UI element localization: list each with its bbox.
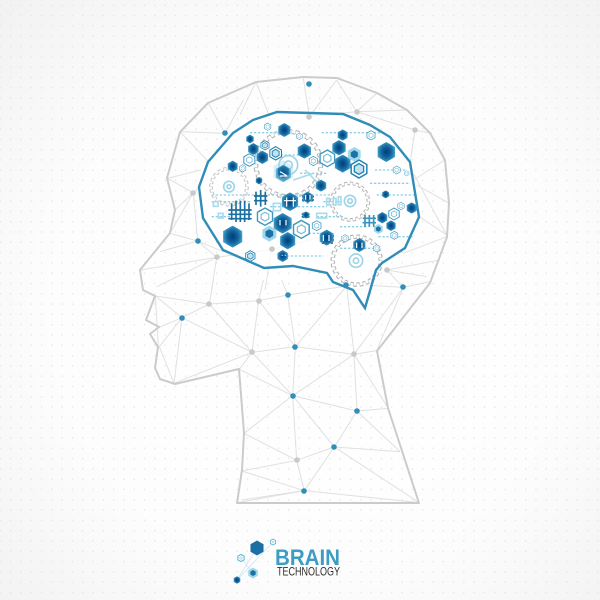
gear: large upper xyxy=(254,130,323,198)
brain outline xyxy=(199,112,419,308)
gear: left xyxy=(210,167,248,206)
mesh: upper head lines xyxy=(141,78,449,290)
brain interior wash xyxy=(199,112,419,308)
head outline xyxy=(140,77,449,503)
gear: bottom xyxy=(331,235,382,286)
gears xyxy=(210,130,382,286)
light hexagons with dark centre xyxy=(262,147,383,242)
gear: right xyxy=(330,182,370,221)
mesh: lower head lines xyxy=(155,280,430,503)
white lattice highlights xyxy=(280,172,362,255)
lattice blocks xyxy=(228,190,334,245)
logo text: BRAIN xyxy=(275,545,340,570)
logo icon: hexagon cluster xyxy=(234,539,276,584)
dark hexagons xyxy=(223,123,417,262)
ring hexagons xyxy=(239,123,409,261)
pale pattern strokes xyxy=(213,170,341,218)
brain details xyxy=(210,123,417,286)
dashed data lines xyxy=(212,133,417,256)
teal mesh nodes xyxy=(179,81,406,494)
logo text xyxy=(275,545,340,578)
grey mesh nodes xyxy=(190,109,418,463)
logo text: TECHNOLOGY xyxy=(277,564,340,578)
